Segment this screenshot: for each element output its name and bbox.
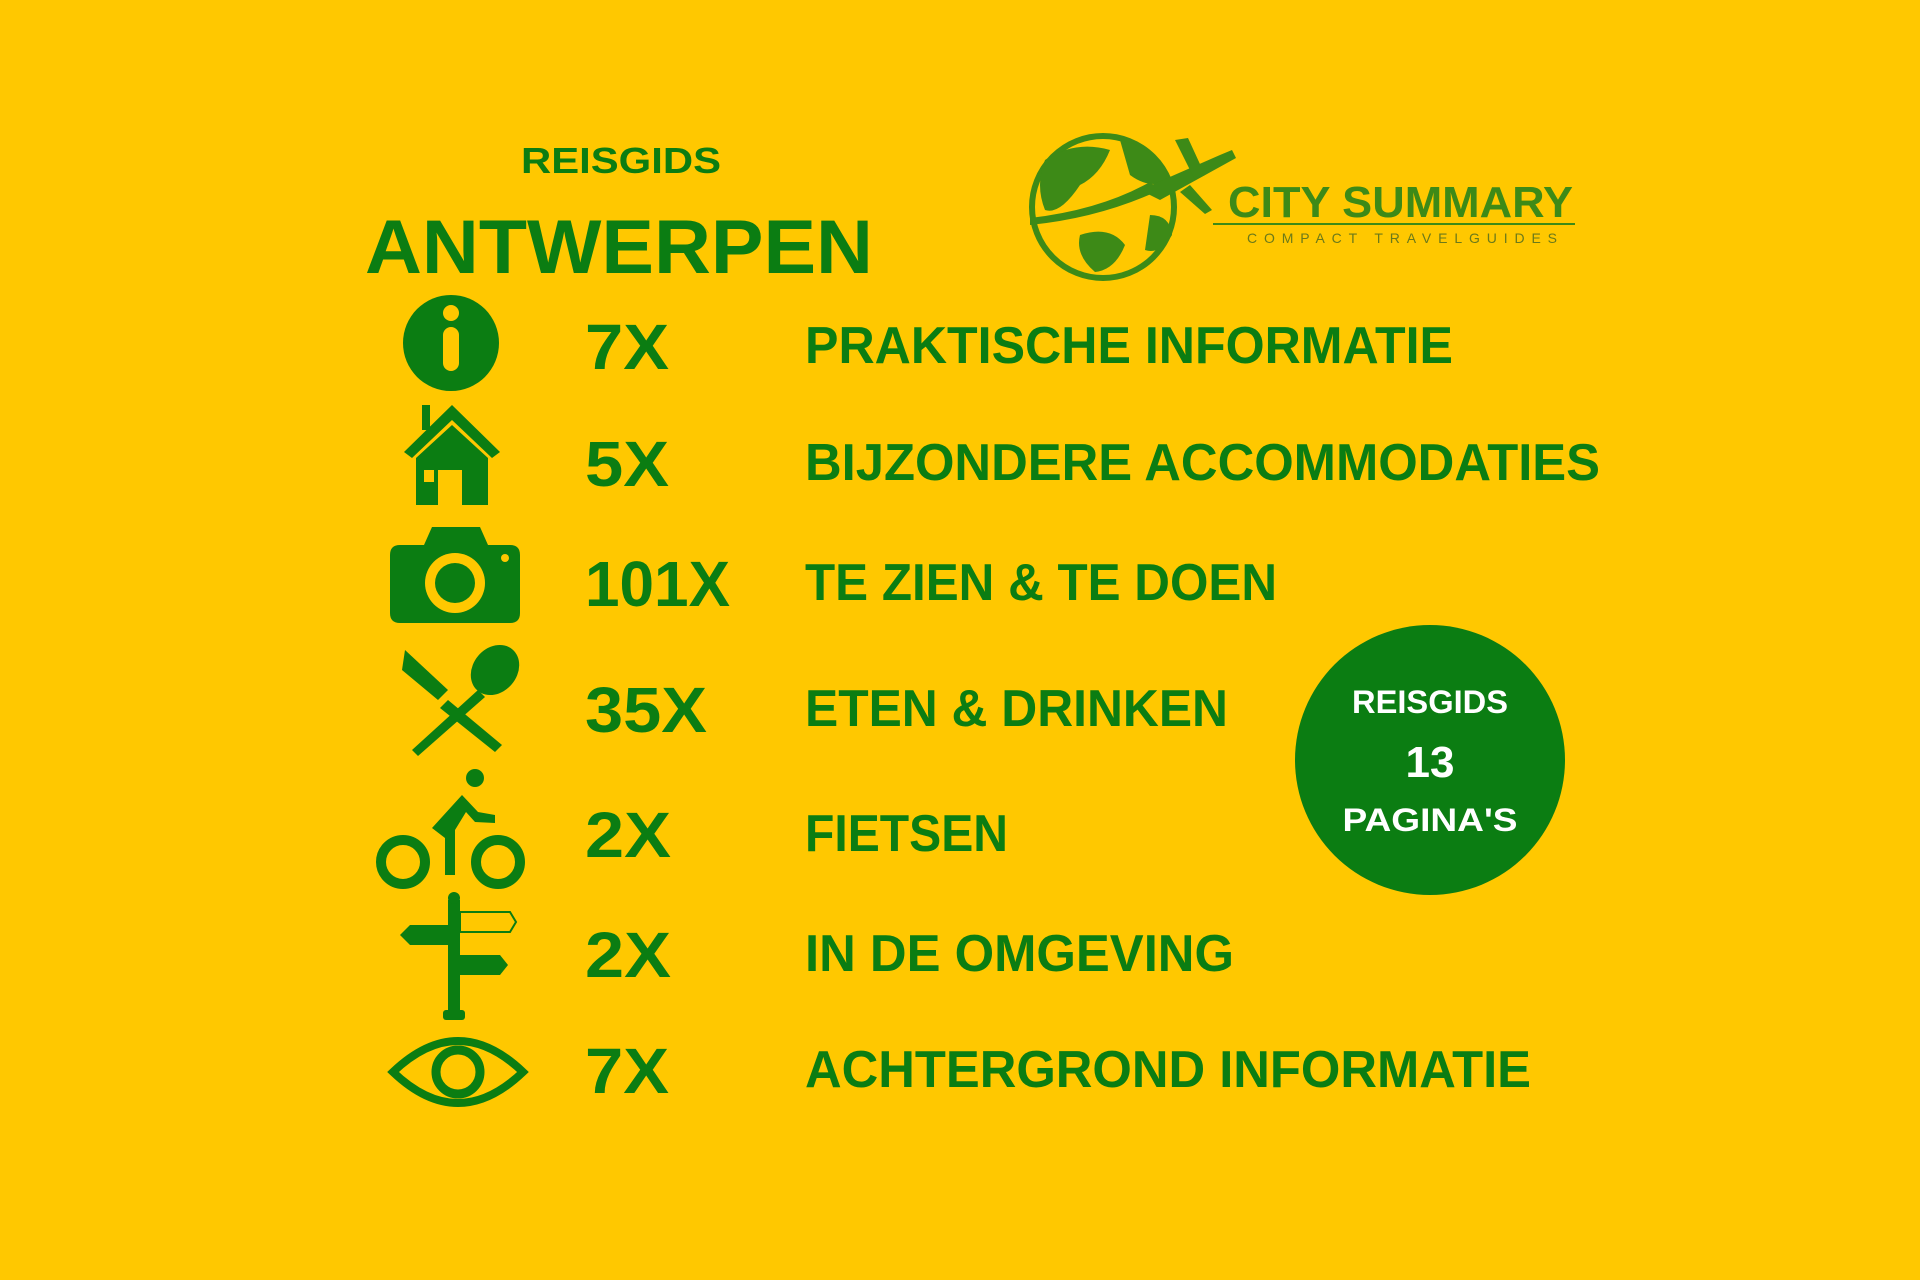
icon: signpost — [400, 892, 516, 1020]
row: fietsen: 2X — [585, 799, 671, 871]
row: praktische informatie: 7X — [585, 311, 669, 383]
logo: city summary — [1030, 136, 1575, 278]
row: eten: ETEN & DRINKEN — [805, 680, 1228, 738]
badge: 13 pagina's: 13 — [1406, 738, 1454, 787]
icon: cutlery — [402, 635, 529, 756]
row: achtergrond: 7X — [585, 1035, 669, 1107]
row: eten — [402, 635, 1228, 756]
row: te zien: 101X — [585, 548, 730, 620]
row: te zien — [390, 527, 1277, 623]
row: fietsen: FIETSEN — [805, 805, 1008, 863]
row: praktische informatie: PRAKTISCHE INFORMATIE — [805, 317, 1453, 375]
row: omgeving — [400, 892, 1234, 1020]
row: omgeving: 2X — [585, 919, 671, 991]
icon: eye — [393, 1041, 523, 1103]
badge: 13 pagina's: PAGINA'S — [1342, 802, 1518, 838]
row: accommodaties — [404, 405, 1600, 505]
row: fietsen — [381, 769, 1008, 884]
row: praktische informatie — [403, 295, 1453, 391]
row: achtergrond: ACHTERGROND INFORMATIE — [805, 1041, 1531, 1099]
row: accommodaties: 5X — [585, 428, 669, 500]
logo: city summary: COMPACT TRAVELGUIDES — [1247, 230, 1557, 246]
icon: info — [403, 295, 499, 391]
logo text: CITY SUMMARY — [1228, 178, 1573, 227]
row: accommodaties: BIJZONDERE ACCOMMODATIES — [805, 434, 1600, 492]
badge: 13 pagina's: REISGIDS — [1352, 684, 1508, 720]
row: omgeving: IN DE OMGEVING — [805, 925, 1234, 983]
row: achtergrond — [393, 1035, 1531, 1107]
badge: 13 pagina's — [1295, 625, 1565, 895]
icon: house — [404, 405, 500, 505]
title: antwerpen: ANTWERPEN — [365, 205, 873, 290]
icon: globe with plane — [1030, 136, 1236, 278]
icon: bicycle — [381, 769, 520, 884]
row: eten: 35X — [585, 674, 707, 746]
row: te zien: TE ZIEN & TE DOEN — [805, 554, 1277, 612]
heading: reisgids: REISGIDS — [521, 140, 721, 181]
icon: camera — [390, 527, 520, 623]
